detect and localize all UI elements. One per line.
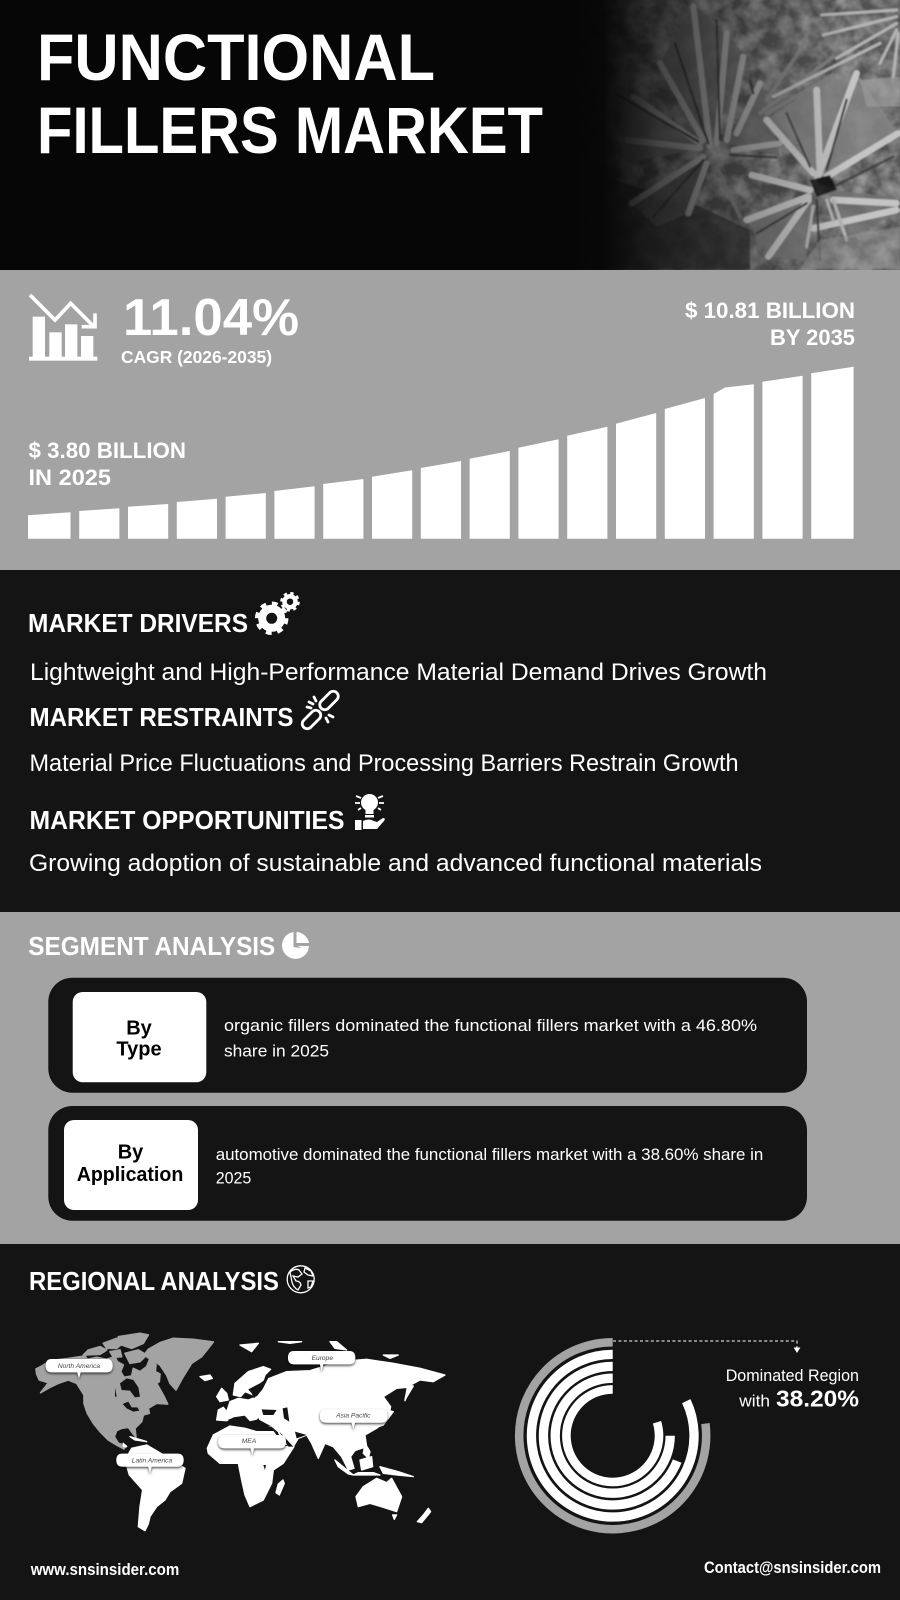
dominated region callout: 38.20% <box>776 1386 859 1412</box>
region: rest of world <box>123 1342 445 1531</box>
callout: MEA <box>218 1435 286 1455</box>
dominated region callout <box>726 1367 859 1412</box>
callout: Europe <box>288 1351 355 1371</box>
CAGR value: 11.04% <box>123 289 299 347</box>
2035 value: $ 10.81 BILLION <box>685 298 855 323</box>
heading: regional analysis: REGIONAL ANALYSIS <box>29 1266 279 1296</box>
title: FUNCTIONAL <box>37 20 435 94</box>
icon: gears <box>257 593 298 633</box>
callout: Latin America: Latin America <box>132 1458 173 1465</box>
by type text: share in 2025 <box>224 1042 329 1061</box>
panel: regional analysis <box>0 1244 900 1600</box>
by application text: automotive dominated the functional fillers market with a 38.60% share in <box>216 1145 763 1164</box>
label box: by type <box>73 992 206 1082</box>
website: www.snsinsider.com <box>30 1561 179 1579</box>
label box: by type: Type <box>116 1039 162 1061</box>
label box: by type: By <box>126 1017 153 1039</box>
drivers text: Lightweight and High-Performance Material Demand Drives Growth <box>30 659 767 686</box>
by application text: 2025 <box>216 1168 251 1187</box>
card: by application <box>48 1106 807 1221</box>
dominated region callout: Dominated Region <box>726 1367 859 1385</box>
callout: MEA: MEA <box>242 1438 257 1445</box>
2025 value <box>28 438 186 490</box>
2035 value: BY 2035 <box>770 325 855 350</box>
header panel <box>0 0 900 270</box>
2025 value: IN 2025 <box>28 465 111 490</box>
heading: market drivers: MARKET DRIVERS <box>28 608 248 638</box>
arrow: dashed leader <box>613 1341 800 1352</box>
card: by type <box>48 978 807 1093</box>
heading: market opportunities: MARKET OPPORTUNITIES <box>30 805 344 835</box>
title: FILLERS MARKET <box>37 93 543 167</box>
heading: market restraints: MARKET RESTRAINTS <box>30 702 294 732</box>
label box: by application <box>64 1120 198 1210</box>
callout: North America: North America <box>58 1363 100 1370</box>
icon: globe <box>287 1266 314 1293</box>
panel: market size <box>0 270 900 570</box>
bar chart: market growth <box>28 367 854 539</box>
contact email: Contact@snsinsider.com <box>704 1559 881 1577</box>
restraints text: Material Price Fluctuations and Processing Barriers Restrain Growth <box>30 750 738 777</box>
2025 value: $ 3.80 BILLION <box>28 438 186 463</box>
label box: by application: By <box>118 1141 144 1163</box>
dominated region callout: with <box>738 1392 770 1411</box>
callout: Asia Pacific: Asia Pacific <box>335 1413 371 1420</box>
inland seas <box>228 1382 307 1470</box>
icon: lightbulb in hand <box>355 794 385 830</box>
icon: broken chain <box>300 689 340 731</box>
radial bar chart <box>519 1342 706 1529</box>
heading: segment analysis: SEGMENT ANALYSIS <box>28 931 275 961</box>
icon: pie chart <box>282 932 309 959</box>
callout: Asia Pacific <box>320 1409 388 1429</box>
label box: by application: Application <box>77 1164 183 1186</box>
callout: North America <box>46 1359 113 1378</box>
by type text: organic fillers dominated the functional fillers market with a 46.80% <box>224 1016 757 1035</box>
icon: chart with falling arrow <box>29 295 97 361</box>
world map <box>36 1333 445 1531</box>
callout: Latin America <box>116 1454 184 1473</box>
by type text <box>224 1016 757 1061</box>
2035 value <box>685 298 855 350</box>
region: North America highlighted <box>36 1333 213 1449</box>
opportunities text: Growing adoption of sustainable and advanced functional materials <box>29 850 762 877</box>
title <box>37 20 543 167</box>
callout: Europe: Europe <box>312 1355 333 1362</box>
panel: segment analysis <box>0 912 900 1244</box>
header photo: crystal spikes <box>570 0 900 270</box>
by application text <box>216 1145 763 1187</box>
panel: market dynamics <box>0 570 900 912</box>
CAGR label: CAGR (2026-2035) <box>121 347 272 367</box>
